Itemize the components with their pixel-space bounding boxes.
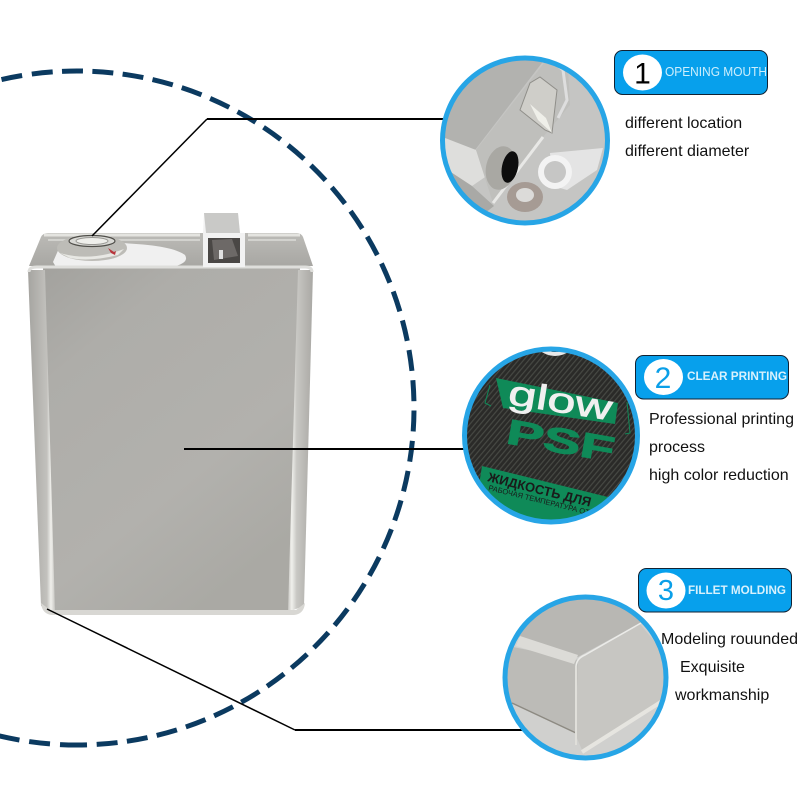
badge 3: FILLET MOLDING <box>688 583 786 597</box>
photo 2: clear printing: ЖИДКОСТЬ ДЛЯ <box>485 469 593 510</box>
badge 1: OPENING MOUTH <box>665 65 767 79</box>
bottom rim <box>41 603 305 615</box>
photo 3: fillet molding <box>500 590 680 758</box>
text block 2: high color reduction <box>649 467 789 484</box>
text block 2: process <box>649 439 705 456</box>
dashed circle <box>0 71 414 745</box>
photo 1: opening mouth <box>440 50 608 225</box>
badge 1: 1 <box>634 58 651 90</box>
text block 1: different location <box>625 115 742 132</box>
badge 2: CLEAR PRINTING <box>687 369 787 383</box>
text block 3: workmanship <box>674 687 769 704</box>
badge 3 <box>638 568 792 612</box>
top rim <box>29 267 312 272</box>
right edge <box>288 270 313 612</box>
text block 1 <box>625 115 750 160</box>
badge 1 <box>614 50 768 94</box>
can top panel <box>29 233 313 266</box>
text block 1: different diameter <box>625 143 750 160</box>
badge 3: 3 <box>658 575 674 607</box>
photo 2: clear printing: PSF <box>504 412 618 469</box>
leader lines <box>47 119 527 730</box>
opening cap <box>57 235 127 261</box>
product: metal can <box>28 213 313 615</box>
text block 3: Exquisite <box>680 659 745 676</box>
white plastic seal <box>53 243 186 267</box>
left edge <box>28 270 55 612</box>
text block 2: Professional printing <box>649 411 794 428</box>
badge 2: 2 <box>655 362 671 395</box>
text block 2 <box>649 411 794 484</box>
badge 2 <box>636 356 788 399</box>
text block 3 <box>661 631 798 704</box>
can front panel <box>43 268 300 612</box>
handle <box>203 213 245 267</box>
photo 2: clear printing: РАБОЧАЯ ТЕМПЕРАТУРА ОТ <box>488 483 591 517</box>
photo 2: clear printing <box>464 346 638 530</box>
text block 3: Modeling rouunded <box>661 631 798 648</box>
photo 2: clear printing: glow <box>506 374 615 428</box>
